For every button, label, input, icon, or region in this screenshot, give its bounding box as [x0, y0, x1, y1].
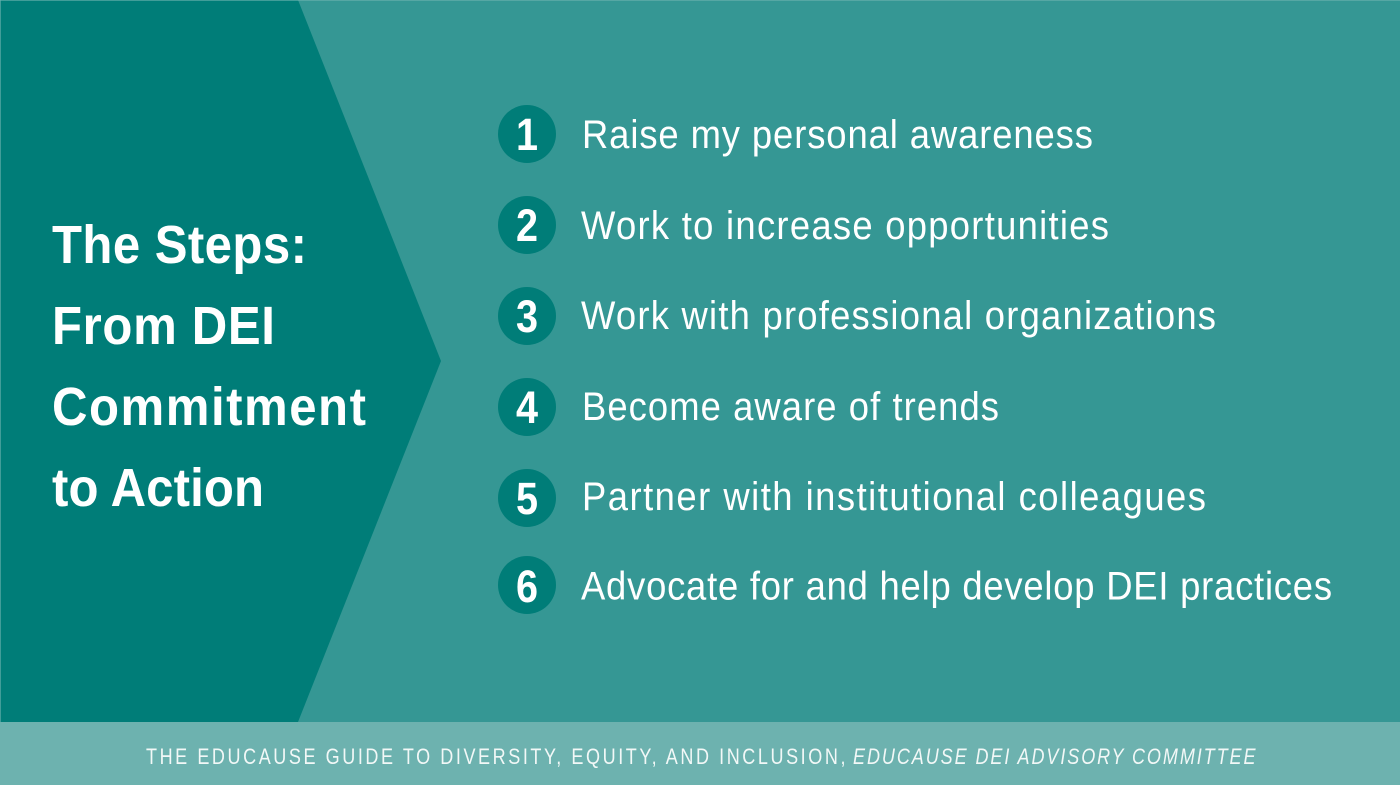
step 5: Partner with institutional colleagues	[582, 474, 1206, 519]
heading: Commitment	[52, 376, 366, 437]
step 5	[498, 469, 1206, 527]
source credit	[146, 745, 1256, 769]
panel: dark arrow with heading	[0, 0, 441, 722]
steps list	[498, 105, 1332, 614]
step 4	[498, 378, 999, 436]
step 1: Raise my personal awareness	[582, 112, 1093, 157]
heading	[52, 214, 366, 518]
step 6: Advocate for and help develop DEI practices	[581, 564, 1332, 609]
step 1: 1	[516, 110, 538, 160]
source credit: EDUCAUSE DEI ADVISORY COMMITTEE	[853, 745, 1256, 769]
heading: The Steps:	[52, 214, 307, 275]
step 1	[498, 105, 1093, 163]
step 2: 2	[516, 201, 538, 251]
step 4: Become aware of trends	[582, 384, 999, 429]
step 6	[498, 556, 1332, 614]
step 2	[498, 196, 1109, 254]
step 4: 4	[516, 383, 538, 433]
step 6: 6	[516, 562, 538, 612]
source credit: THE EDUCAUSE GUIDE TO DIVERSITY, EQUITY, AND INCLUSION,	[146, 745, 845, 769]
heading: to Action	[52, 457, 264, 518]
step 2: Work to increase opportunities	[581, 203, 1109, 248]
step 3: 3	[516, 292, 538, 342]
step 3: Work with professional organizations	[581, 293, 1216, 338]
footer band	[0, 722, 1400, 785]
step 3	[498, 287, 1216, 345]
heading: From DEI	[52, 295, 275, 356]
step 5: 5	[516, 474, 538, 524]
